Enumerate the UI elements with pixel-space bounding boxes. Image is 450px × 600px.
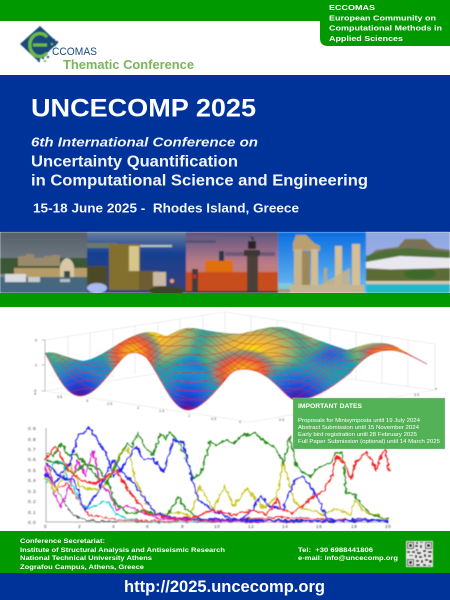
axis labels: 2.5 [368,400,373,404]
conference name line 1: Uncertainty Quantification [31,154,238,170]
panel: blue title block [0,75,450,232]
axis labels: 1.5 [159,409,164,413]
axis labels: -5 [33,389,36,393]
series: cyan [47,462,200,522]
series: second green [47,460,388,521]
axes: 10 [214,524,220,530]
axis labels: 4 [435,387,437,391]
icon: ECCOMAS logo [20,26,58,62]
dates list: Full Paper Submission (optional) until 14 March 2025 [298,439,440,445]
series: thin red lower [47,463,388,521]
date and place: 15-18 June 2025 - Rhodes Island, Greece [33,202,299,216]
panel: ECCOMAS community tab: ECCOMAS [329,3,375,12]
panel: ECCOMAS community tab: Computational Methods in [329,24,443,32]
series: second blue [47,460,388,521]
subtitle: 6th International Conference on [31,134,258,150]
secretariat address: Institute of Structural Analysis and Antiseismic Research [20,547,225,554]
top green band [0,0,450,21]
axes: 0.6 [28,457,36,463]
axis labels: 0 [35,364,37,368]
photo: Lindos village and bay [366,232,450,293]
dates list: Early bird registration until 28 February 2025 [298,432,417,438]
wire mesh family two [46,327,406,410]
axes: 0.3 [28,489,36,495]
axis labels: 4 [34,392,36,396]
dates list [298,418,440,445]
axes: 14 [282,524,288,530]
axis labels: 1 [188,414,190,418]
axes: 12 [248,524,254,530]
surface [44,326,423,410]
axis labels: 5 [35,338,37,342]
axis labels: 3.5 [414,393,419,397]
heading: Thematic Conference: Thematic Conference [63,58,194,72]
panel: footer contact band [0,531,450,573]
title: UNCECOMP 2025 [31,94,256,122]
conference name line 2: in Computational Science and Engineering [31,172,368,190]
axes: 0 [44,524,47,530]
axes: 16 [316,524,322,530]
axes: 0.8 [28,437,36,443]
axes [28,426,391,530]
chart: stochastic simulation line chart [28,426,391,530]
series: long red [45,447,389,519]
secretariat address: Zografou Campus, Athens, Greece [20,564,144,571]
photo: Lindos temple columns [278,232,366,293]
logo wordmark: CCOMAS [52,46,97,58]
wire mesh family one [54,327,372,408]
secretariat address: National Technical University Athens [20,555,152,562]
panel: ECCOMAS community tab: Applied Sciences [329,34,403,43]
axes: 6 [146,524,149,530]
secretariat address [20,538,225,571]
axes: 8 [181,524,184,530]
axes: 0.1 [28,510,36,516]
data lines [45,428,389,522]
series: long green [47,432,388,519]
axis labels: 2 [137,406,139,410]
axes: 0.5 [28,468,36,474]
chart: 3D surface plot [33,312,438,424]
axes: 20 [385,524,391,530]
axis labels: 3 [86,399,88,403]
series: black [45,473,300,522]
axes: 0.4 [28,478,36,484]
photo: harbour [0,232,87,293]
dates heading: IMPORTANT DATES [298,403,363,410]
dates list: Abstract Submission until 15 November 2024 [298,425,419,431]
panel: ECCOMAS community tab [320,0,450,46]
photo: fortress at dusk [186,232,278,293]
axes: 18 [351,524,357,530]
panel: website band [0,573,450,600]
axes: 0.7 [28,447,36,453]
series: long blue [45,428,388,521]
contact details [298,547,398,562]
secretariat address: Conference Secretariat: [20,538,105,545]
axis labels: 0.5 [211,417,216,421]
dates list: Proposals for Minisymposia until 19 July 2024 [298,418,420,424]
axes: 0.0 [28,520,36,526]
panel: photo strip of Rhodes [0,232,450,296]
contact details: e-mail: info@uncecomp.org [298,555,398,562]
axis labels: 0 [239,420,241,424]
contact details: Tel: +30 6988441806 [298,547,373,554]
series: magenta [45,450,387,521]
series: olive yellow [45,448,388,518]
axes and back walls [45,312,435,422]
panel: ECCOMAS community tab: European Community on [329,14,437,22]
axis labels: 3.5 [57,395,62,399]
axis labels [33,338,437,424]
photo: hotel at night [87,232,186,296]
surface front edge [45,350,427,410]
axes: 4 [112,524,115,530]
icon: QR code [406,541,433,567]
axes: 0.2 [28,499,36,505]
axes: 2 [78,524,81,530]
panel: important dates [293,398,445,449]
website URL: http://2025.uncecomp.org [124,577,325,596]
axis labels: 0.5 [279,418,284,422]
green band below photos [0,293,450,307]
axis labels: 2.5 [107,402,112,406]
axes: 0.9 [28,426,36,432]
